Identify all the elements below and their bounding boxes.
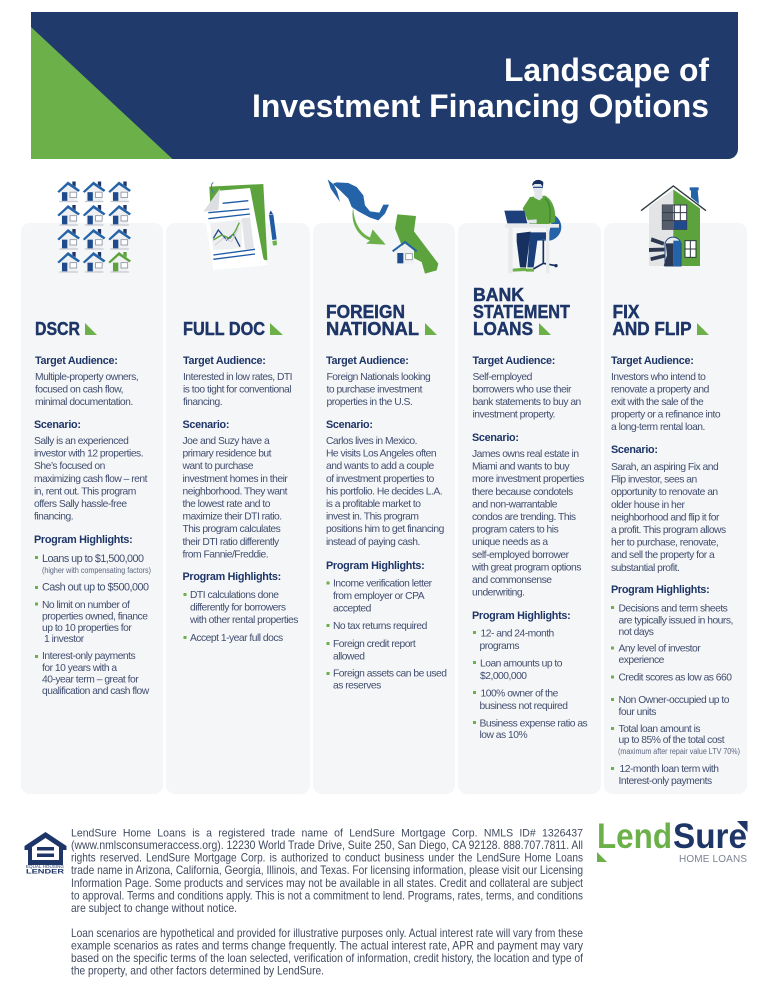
scenario: positions him to get financing xyxy=(326,524,445,535)
scenario: neighborhood. They want xyxy=(182,486,288,497)
program highlights: Loan amounts up to xyxy=(480,658,563,670)
program highlights: from employer or CPA xyxy=(333,591,425,602)
scenario: program caters to his xyxy=(472,525,559,536)
program highlights: Program Highlights: xyxy=(611,584,709,596)
scenario: underwriting. xyxy=(472,588,524,599)
scenario: He visits Los Angeles often xyxy=(326,449,437,460)
scenario: a profit. This program allows xyxy=(611,525,726,536)
target audience: property or a refinance into xyxy=(611,410,721,420)
program highlights: as reserves xyxy=(333,680,381,692)
target audience: focused on cash flow, xyxy=(35,384,123,396)
program highlights: low as 10% xyxy=(480,730,528,741)
program highlights: accepted xyxy=(333,604,372,614)
target audience: bank statements to buy an xyxy=(472,397,582,408)
scenario: their DTI ratio differently xyxy=(182,537,280,548)
program highlights: differently for borrowers xyxy=(190,602,286,614)
scenario: Joe and Suzy have a xyxy=(182,436,270,447)
target audience: to purchase investment xyxy=(326,384,423,396)
heading: BANK STATEMENT LOANS: STATEMENT xyxy=(473,302,570,322)
scenario: of investment properties to xyxy=(326,474,435,485)
target audience: is too tight for conventional xyxy=(183,384,291,396)
program highlights: experience xyxy=(618,655,665,666)
program highlights xyxy=(611,584,740,787)
scenario: Carlos lives in Mexico. xyxy=(326,436,417,447)
program highlights: four units xyxy=(618,707,656,718)
program highlights: (maximum after repair value LTV 70%) xyxy=(618,747,740,756)
scenario: condos are trending. This xyxy=(472,512,576,523)
heading: FIX AND FLIP: FIX xyxy=(612,302,640,322)
scenario: opportunity to renovate an xyxy=(611,487,718,498)
scenario: substantial profit. xyxy=(611,563,679,574)
heading: BANK STATEMENT LOANS: BANK xyxy=(473,285,524,305)
panel: FOREIGN NATIONAL xyxy=(313,179,455,794)
scenario: Scenario: xyxy=(326,419,373,431)
scenario: there because condotels xyxy=(472,487,573,498)
scenario: Scenario: xyxy=(182,419,229,431)
logo: LendSure Home Loans: Lend xyxy=(597,817,672,856)
scenario disclaimer: example scenarios as rates and terms change frequently. The actual interest rate, APR and payment may vary xyxy=(71,939,583,952)
legal disclaimer: are subject to change without notice. xyxy=(71,902,237,915)
icon: Mexico to California map xyxy=(328,179,438,274)
program highlights: 12-month loan term with xyxy=(620,764,719,775)
heading: BANK STATEMENT LOANS xyxy=(473,285,570,339)
scenario: is a profitable market to xyxy=(326,499,421,510)
program highlights: Non Owner-occupied up to xyxy=(618,695,730,706)
panel: FULL DOC xyxy=(166,183,310,794)
program highlights: Interest-only payments xyxy=(42,651,136,662)
icon: document with chart xyxy=(203,183,277,270)
program highlights: 12- and 24-month xyxy=(480,628,555,640)
program highlights: 1 investor xyxy=(44,634,85,645)
title: Landscape of xyxy=(504,52,709,88)
program highlights: with other rental properties xyxy=(189,615,298,626)
scenario: Miami and wants to buy xyxy=(472,462,571,473)
program highlights: Total loan amount is xyxy=(618,724,700,735)
heading: FIX AND FLIP: AND FLIP xyxy=(612,319,692,339)
program highlights: properties owned, finance xyxy=(42,612,148,622)
heading: FOREIGN NATIONAL xyxy=(326,302,437,339)
icon: twelve houses xyxy=(57,182,131,273)
icon: half renovated house xyxy=(641,186,706,266)
heading: FIX AND FLIP xyxy=(612,302,709,339)
target audience: financing. xyxy=(183,397,222,408)
scenario disclaimer: Loan scenarios are hypothetical and provided for illustrative purposes only. Actual interest rate will vary from these xyxy=(71,927,583,940)
program highlights: business not required xyxy=(480,701,568,712)
target audience: investment property. xyxy=(472,410,555,420)
scenario: Scenario: xyxy=(611,444,658,456)
scenario: neighborhood and flip it for xyxy=(611,512,720,523)
target audience: Target Audience: xyxy=(35,355,118,367)
heading: FOREIGN NATIONAL: FOREIGN xyxy=(326,302,405,322)
program highlights: Interest-only payments xyxy=(618,776,712,787)
program highlights: Foreign credit report xyxy=(333,639,416,650)
scenario: James owns real estate in xyxy=(472,449,579,460)
scenario: primary residence but xyxy=(182,449,272,460)
panel: DSCR xyxy=(21,182,163,794)
scenario: Sarah, an aspiring Fix and xyxy=(611,462,719,473)
program highlights: allowed xyxy=(333,652,365,662)
scenario: and non-warrantable xyxy=(472,499,558,510)
target audience: borrowers who use their xyxy=(472,384,572,396)
scenario: maximize their DTI ratio. xyxy=(182,512,282,523)
panel: FIX AND FLIP xyxy=(604,186,747,794)
scenario: his portfolio. He decides L.A. xyxy=(326,486,442,497)
program highlights: Income verification letter xyxy=(333,578,433,590)
panel: BANK STATEMENT LOANS xyxy=(458,180,601,794)
program highlights: qualification and cash flow xyxy=(42,686,150,697)
heading: BANK STATEMENT LOANS: LOANS xyxy=(473,319,533,339)
program highlights: Any level of investor xyxy=(618,644,701,654)
program highlights: Program Highlights: xyxy=(34,534,132,546)
target audience: Target Audience: xyxy=(611,355,694,367)
scenario: the lowest rate and to xyxy=(182,499,271,510)
target audience: minimal documentation. xyxy=(35,397,133,408)
scenario: Sally is an experienced xyxy=(34,436,129,447)
legal disclaimer: to approval. Terms and conditions apply. This is not a commitment to lend. Programs, rates, terms, and conditions xyxy=(71,889,583,902)
target audience: Investors who intend to xyxy=(611,372,706,383)
program highlights: Foreign assets can be used xyxy=(333,668,447,680)
scenario: older house in her xyxy=(611,500,686,511)
scenario: investment homes in their xyxy=(182,474,288,485)
target audience: Target Audience: xyxy=(183,355,266,367)
program highlights xyxy=(182,571,298,644)
scenario: in, rent out. This program xyxy=(34,486,136,497)
program highlights: Program Highlights: xyxy=(182,571,281,583)
target audience: Multiple-property owners, xyxy=(35,372,138,383)
scenario: Flip investor, sees an xyxy=(611,475,697,486)
icon: equal housing lender xyxy=(24,832,66,876)
legal disclaimer: trade name in Arizona, California, Georgia, Illinois, and Texas. For licensing information, please visit our Licensing xyxy=(71,864,583,877)
target audience: properties in the U.S. xyxy=(326,397,412,408)
program highlights: Program Highlights: xyxy=(326,560,424,572)
target audience: Self-employed xyxy=(472,372,533,383)
program highlights: up to 10 properties for xyxy=(42,623,132,634)
target audience: Interested in low rates, DTI xyxy=(183,372,292,383)
program highlights: Business expense ratio as xyxy=(480,718,588,730)
scenario: more investment properties xyxy=(472,474,584,485)
icon: equal housing lender: EQUAL HOUSING xyxy=(26,864,64,869)
scenario: with great program options xyxy=(471,562,581,573)
icon: equal housing lender: LENDER xyxy=(26,870,65,876)
program highlights: Cash out up to $500,000 xyxy=(42,582,149,594)
legal disclaimer: rights reserved. LendSure Mortgage Corp. is authorized to conduct business under the LendSure Home Loans xyxy=(71,852,583,865)
program highlights: No tax returns required xyxy=(333,621,428,632)
scenario: her to purchase, renovate, xyxy=(611,538,718,549)
target audience: a long-term rental loan. xyxy=(611,422,705,433)
program highlights: Credit scores as low as 660 xyxy=(618,672,732,684)
scenario: instead of paying cash. xyxy=(326,537,420,548)
heading: FOREIGN NATIONAL: NATIONAL xyxy=(326,319,419,339)
scenario: and wants to add a couple xyxy=(326,461,434,472)
program highlights: (higher with compensating factors) xyxy=(42,566,151,575)
logo: LendSure Home Loans: Sure xyxy=(673,817,747,856)
scenario: This program calculates xyxy=(182,524,281,535)
program highlights: are typically issued in hours, xyxy=(618,616,733,626)
scenario: and sell the property for a xyxy=(611,550,715,561)
program highlights: No limit on number of xyxy=(42,600,130,611)
scenario: unique needs as a xyxy=(472,537,548,548)
logo: LendSure Home Loans xyxy=(597,817,748,865)
heading: DSCR: DSCR xyxy=(35,319,80,339)
program highlights: for 10 years with a xyxy=(42,663,117,674)
program highlights: up to 85% of the total cost xyxy=(618,735,725,746)
program highlights: Program Highlights: xyxy=(472,610,570,622)
program highlights: 40-year term – great for xyxy=(42,674,139,686)
program highlights: 100% owner of the xyxy=(480,688,559,700)
program highlights: not days xyxy=(618,627,654,638)
program highlights xyxy=(472,610,588,741)
scenario: invest in. This program xyxy=(326,512,418,523)
scenario: from Fannie/Freddie. xyxy=(182,549,268,560)
heading: FULL DOC: FULL DOC xyxy=(183,319,265,339)
program highlights: programs xyxy=(480,641,519,652)
scenario: Scenario: xyxy=(472,432,519,444)
legal disclaimer: LendSure Home Loans is a registered trade name of LendSure Mortgage Corp. NMLS ID# 1326437 xyxy=(71,828,583,840)
scenario: financing. xyxy=(34,512,73,523)
target audience: exit with the sale of the xyxy=(611,397,704,408)
scenario: Scenario: xyxy=(34,419,81,431)
scenario: self-employed borrower xyxy=(472,550,570,561)
icon: person working at laptop xyxy=(504,180,561,273)
target audience: renovate a property and xyxy=(611,384,710,396)
scenario: maximizing cash flow – rent xyxy=(34,474,148,485)
program highlights: Accept 1-year full docs xyxy=(190,633,283,644)
scenario: and commonsense xyxy=(472,575,552,586)
header banner xyxy=(31,12,738,159)
green triangle accent xyxy=(31,27,172,159)
legal disclaimer: Information Page. Some products and services may not be available in all states. Credit and collateral are subject xyxy=(71,877,584,890)
scenario: offers Sally hassle-free xyxy=(34,499,127,510)
program highlights: DTI calculations done xyxy=(190,590,279,601)
program highlights: $2,000,000 xyxy=(480,671,527,682)
scenario: She’s focused on xyxy=(34,461,106,472)
target audience: Target Audience: xyxy=(326,355,409,367)
legal disclaimer: (www.nmlsconsumeraccess.org). 12230 World Trade Drive, Suite 250, San Diego, CA 92128. 888.707.7811. All xyxy=(71,839,583,852)
scenario: want to purchase xyxy=(182,461,254,472)
target audience: Target Audience: xyxy=(472,355,555,367)
logo: LendSure Home Loans: HOME LOANS xyxy=(679,854,747,865)
title: Investment Financing Options xyxy=(252,88,709,124)
program highlights: Decisions and term sheets xyxy=(618,604,728,614)
program highlights: Loans up to $1,500,000 xyxy=(42,553,144,565)
target audience: Foreign Nationals looking xyxy=(326,372,431,383)
scenario: investor with 12 properties. xyxy=(34,449,143,460)
scenario disclaimer: the property, and other factors determined by LendSure. xyxy=(71,965,324,978)
program highlights xyxy=(326,560,447,692)
program highlights xyxy=(34,534,151,697)
scenario disclaimer: based on the specific terms of the loan selected, verification of information, credit history, the location and type of xyxy=(71,952,584,965)
